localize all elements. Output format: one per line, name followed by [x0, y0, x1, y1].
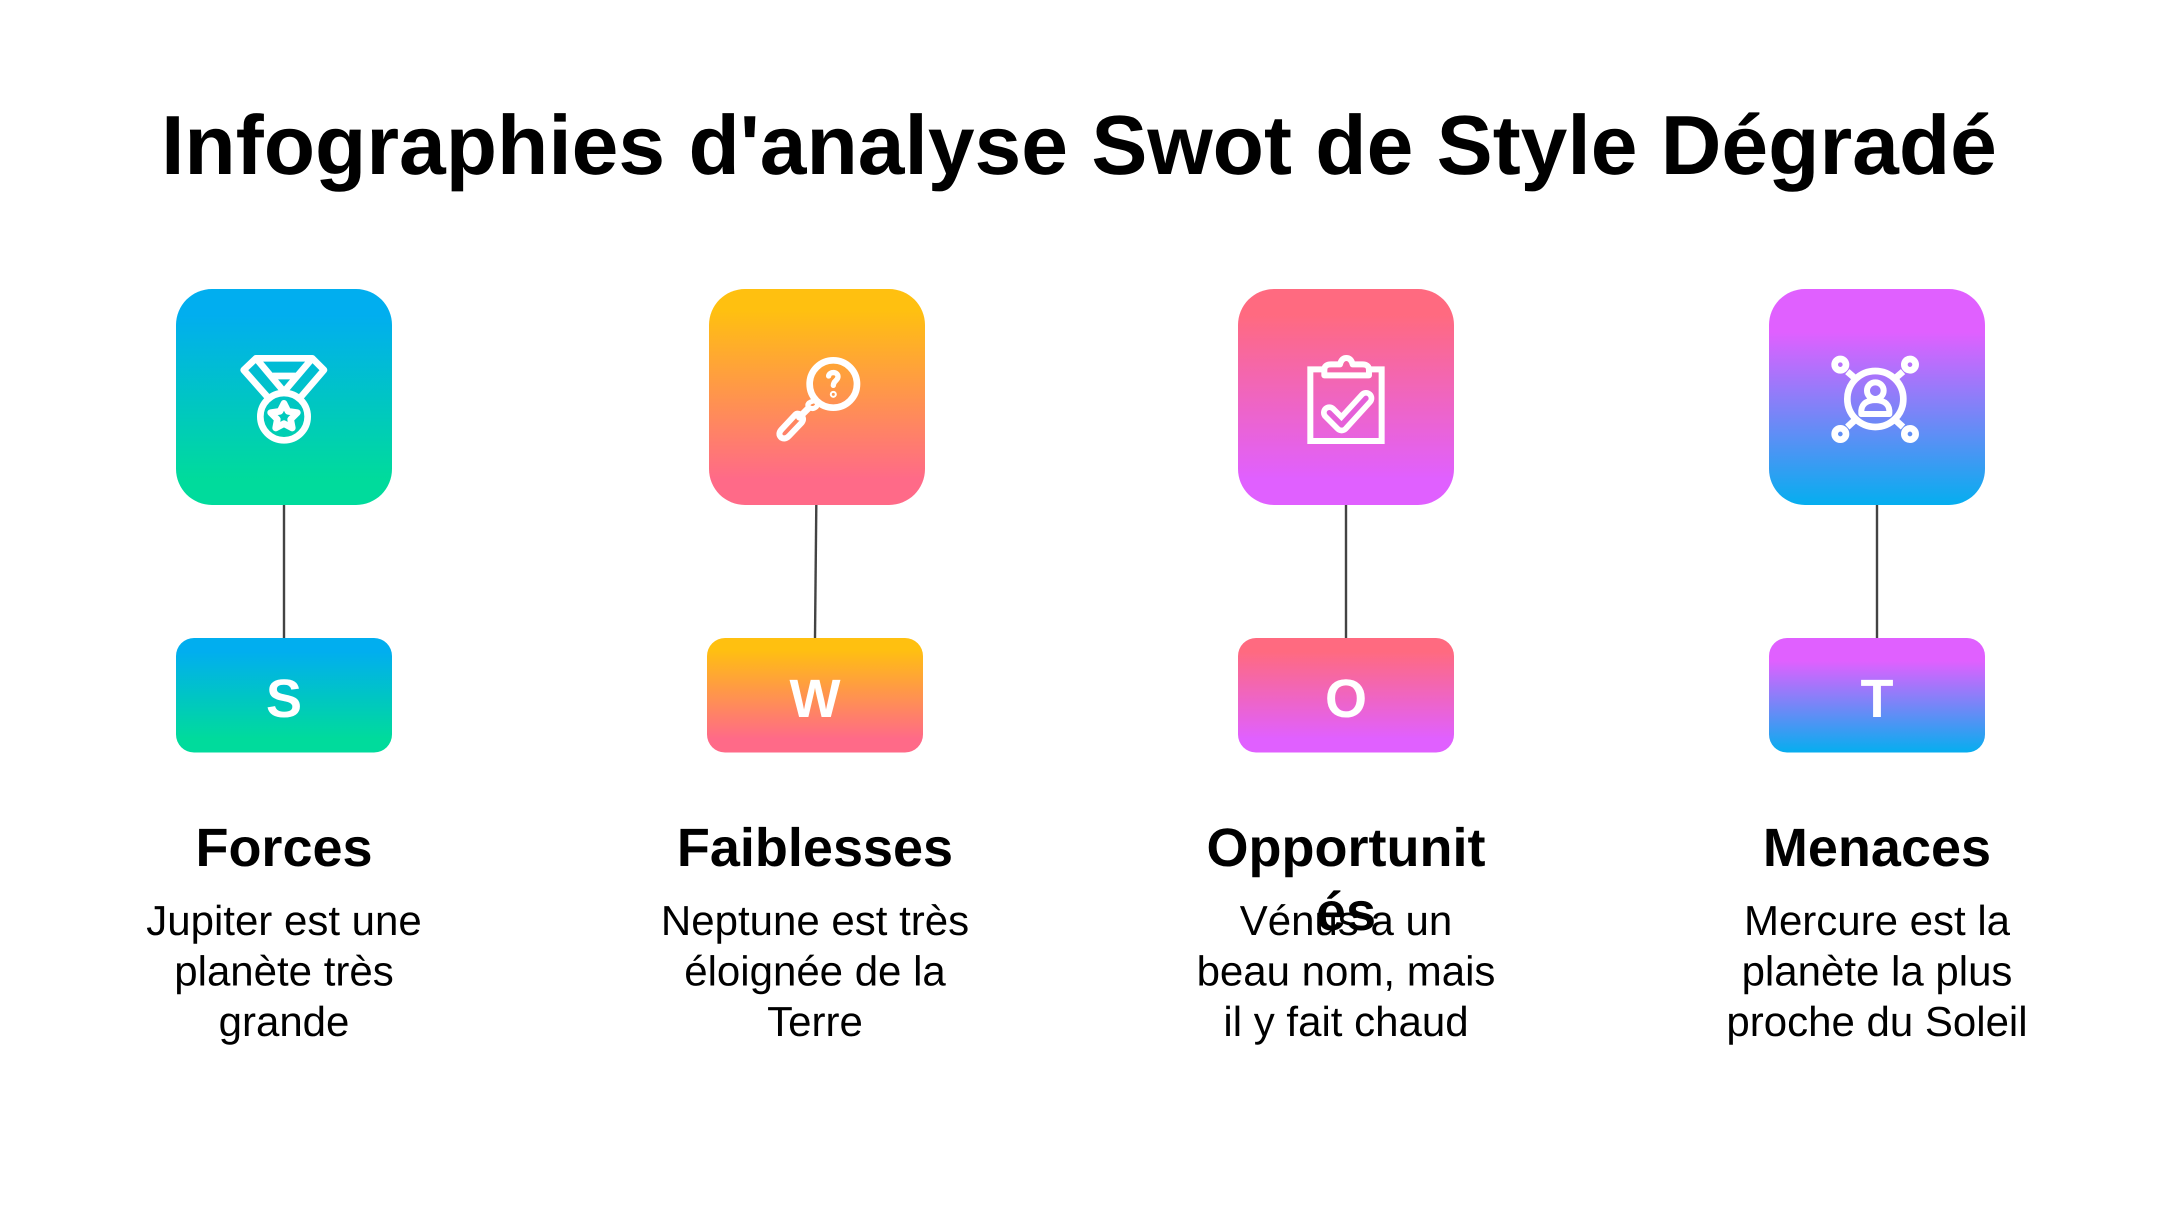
letter box: S: S: [266, 669, 302, 729]
letter box: W: [707, 638, 923, 752]
heading: Menaces: Menaces: [1763, 818, 1991, 878]
letter box: T: [1769, 638, 1985, 752]
text: Forces: grande: [219, 998, 349, 1045]
icon: magnifier question: [779, 360, 857, 438]
icon: medal: [244, 358, 324, 440]
panel: O Opportunités: [1197, 289, 1495, 1045]
heading: Opportunités: és: [1316, 882, 1376, 942]
connector: S: [283, 505, 285, 638]
text: Faiblesses: Terre: [767, 998, 863, 1045]
text: Opportunités: beau nom, mais: [1197, 947, 1495, 994]
icon tile: O: [1238, 289, 1454, 505]
letter box: T: T: [1860, 669, 1894, 729]
icon tile: W: [709, 289, 925, 505]
connector: T: [1876, 505, 1878, 638]
icon: clipboard check: [1310, 358, 1382, 441]
panel: T Menaces: [1726, 289, 2028, 1045]
text: Faiblesses: éloignée de la: [684, 947, 946, 994]
heading: Faiblesses: Faiblesses: [677, 818, 953, 878]
panel: W Faiblesses: [661, 289, 969, 1045]
text: Faiblesses: Neptune est très: [661, 897, 969, 944]
text: Menaces: planète la plus: [1742, 947, 2012, 994]
text: Menaces: proche du Soleil: [1726, 998, 2028, 1045]
letter box: O: O: [1325, 669, 1367, 729]
panel: S Forces: [146, 289, 422, 1045]
text: Forces: Jupiter est une: [146, 897, 422, 944]
connector: W: [815, 505, 816, 638]
letter box: W: W: [790, 669, 841, 729]
letter box: O: [1238, 638, 1454, 752]
heading: Forces: Forces: [195, 818, 373, 878]
title: Infographies d'analyse Swot de Style Dégradé: [161, 98, 1997, 192]
icon tile: S: [176, 289, 392, 505]
text: Opportunités: Vénus a un: [1240, 897, 1452, 944]
text: Menaces: Mercure est la: [1744, 897, 2011, 944]
heading: Opportunités: Opportunit: [1207, 818, 1485, 878]
connector: O: [1345, 505, 1347, 638]
icon: user network: [1835, 359, 1916, 440]
letter box: S: [176, 638, 392, 752]
text: Forces: planète très: [174, 947, 394, 994]
text: Opportunités: il y fait chaud: [1223, 998, 1469, 1045]
icon tile: T: [1769, 289, 1985, 505]
